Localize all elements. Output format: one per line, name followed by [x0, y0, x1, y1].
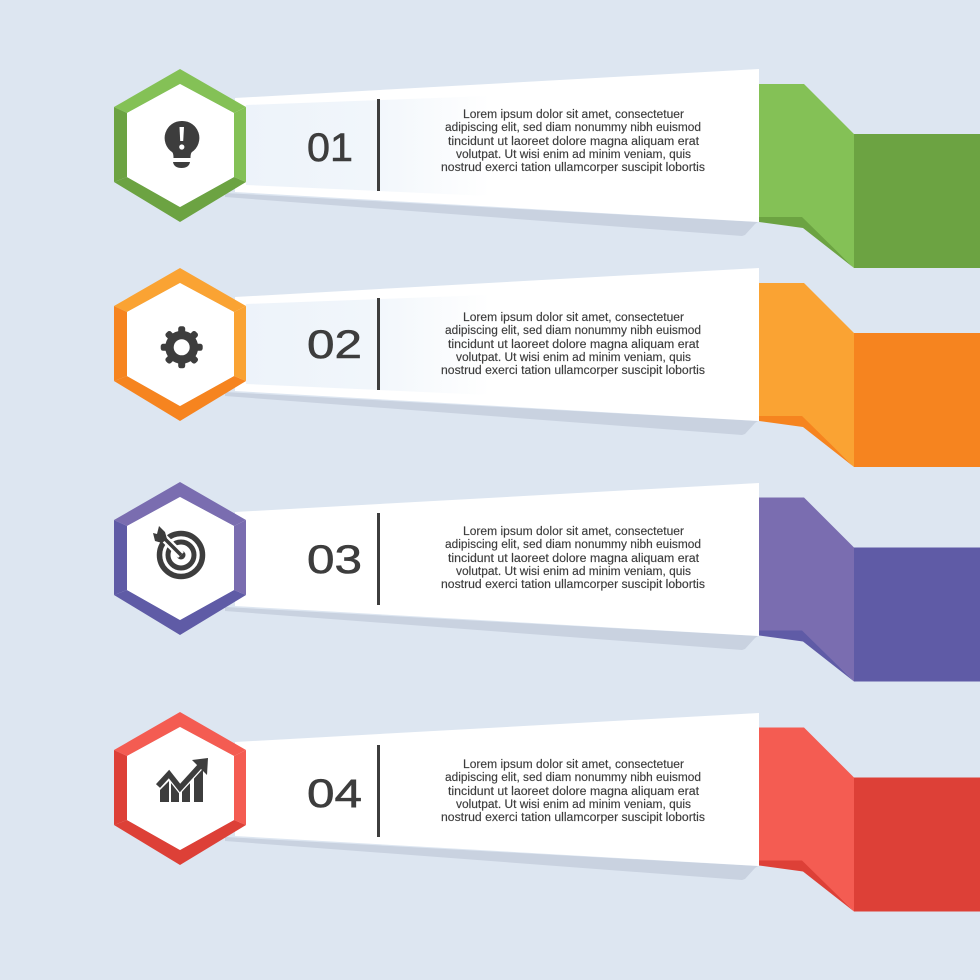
body text [441, 312, 705, 377]
icon: light bulb [165, 121, 199, 168]
body text: tincidunt ut laoreet dolore magna aliquam erat [448, 553, 700, 565]
body text: nostrud exerci tation ullamcorper suscipit lobortis [441, 162, 705, 174]
body text: tincidunt ut laoreet dolore magna aliquam erat [448, 136, 700, 148]
divider [377, 745, 380, 837]
step 03 panel [114, 482, 980, 682]
body text [441, 109, 705, 174]
body text: volutpat. Ut wisi enim ad minim veniam, quis [456, 799, 691, 811]
card shadow [225, 193, 758, 236]
white card [235, 268, 759, 421]
body text: nostrud exerci tation ullamcorper suscipit lobortis [441, 579, 705, 591]
body text: nostrud exerci tation ullamcorper suscipit lobortis [441, 365, 705, 377]
step 02 panel [114, 268, 980, 467]
body text: adipiscing elit, sed diam nonummy nibh euismod [445, 325, 701, 337]
inner tint [246, 295, 490, 395]
body text: volutpat. Ut wisi enim ad minim veniam, quis [456, 352, 691, 364]
hexagon badge: purple [114, 482, 246, 635]
right ribbon: orange [759, 283, 980, 467]
body text: Lorem ipsum dolor sit amet, consectetuer [463, 109, 684, 121]
body text [441, 526, 705, 591]
divider [377, 513, 380, 605]
number 02: 02 [307, 323, 362, 367]
white card [235, 69, 759, 222]
body text: nostrud exerci tation ullamcorper suscipit lobortis [441, 812, 705, 824]
body text: adipiscing elit, sed diam nonummy nibh euismod [445, 122, 701, 134]
icon: gear [161, 326, 203, 368]
body text: adipiscing elit, sed diam nonummy nibh euismod [445, 539, 701, 551]
icon: target with arrow [153, 526, 202, 576]
body text: tincidunt ut laoreet dolore magna aliquam erat [448, 786, 700, 798]
card shadow [225, 607, 758, 650]
right ribbon: red [759, 728, 980, 912]
number 03: 03 [307, 538, 362, 582]
hexagon badge: green [114, 69, 246, 222]
step 04 panel [114, 712, 980, 912]
divider [377, 298, 380, 390]
inner tint [246, 96, 490, 196]
body text: Lorem ipsum dolor sit amet, consectetuer [463, 312, 684, 324]
icon: rising chart [158, 758, 208, 802]
right ribbon: purple [759, 498, 980, 682]
white card [235, 713, 759, 866]
body text: adipiscing elit, sed diam nonummy nibh euismod [445, 772, 701, 784]
body text [441, 759, 705, 824]
body text: volutpat. Ut wisi enim ad minim veniam, quis [456, 149, 691, 161]
step 01 panel [114, 69, 980, 268]
number 01: 01 [307, 126, 353, 170]
number 04: 04 [307, 772, 362, 816]
card shadow [225, 837, 758, 880]
card shadow [225, 392, 758, 435]
right ribbon: green [759, 84, 980, 268]
body text: tincidunt ut laoreet dolore magna aliquam erat [448, 339, 700, 351]
body text: Lorem ipsum dolor sit amet, consectetuer [463, 526, 684, 538]
divider [377, 99, 380, 191]
body text: Lorem ipsum dolor sit amet, consectetuer [463, 759, 684, 771]
hexagon badge: orange [114, 268, 246, 421]
body text: volutpat. Ut wisi enim ad minim veniam, quis [456, 566, 691, 578]
hexagon badge: red [114, 712, 246, 865]
white card [235, 483, 759, 636]
